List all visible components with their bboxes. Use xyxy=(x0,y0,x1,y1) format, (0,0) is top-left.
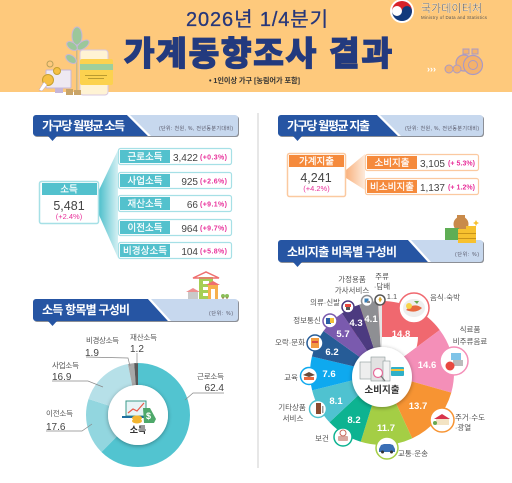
icon: money bag and coins xyxy=(445,215,479,243)
panel: consumption composition xyxy=(275,215,487,459)
pie category labels: 음식·숙박 xyxy=(430,292,460,302)
banner: income heading xyxy=(33,115,239,141)
pie centre: consumption icon and label xyxy=(352,347,412,407)
pie chart xyxy=(346,337,418,409)
icon: plant, phone and monitor illustration xyxy=(39,27,113,95)
donut chart xyxy=(97,374,179,456)
banner: consumption composition heading: (단위: %) xyxy=(455,251,479,258)
icon: food xyxy=(399,293,429,323)
row: earned income: (+0.3%) xyxy=(200,154,227,162)
total income box: (+2.4%) xyxy=(56,212,83,221)
icon: communication xyxy=(323,314,337,328)
pie values: 8.1 xyxy=(329,396,343,407)
pie category labels: ·담배 xyxy=(374,281,390,291)
pie category labels: 교육 xyxy=(284,373,298,382)
donut label: irregular income: 비경상소득 xyxy=(86,335,119,345)
row: earned income xyxy=(118,148,232,164)
pie values: 4.3 xyxy=(349,318,363,329)
row: business income: (+2.6%) xyxy=(200,178,227,186)
pie values: 5.7 xyxy=(336,329,350,340)
donut label: property income xyxy=(130,332,157,364)
row: earned income: 3,422 xyxy=(173,153,198,164)
logo: Ministry of Data and Statistics: 국가데이터처 xyxy=(421,2,482,15)
title: 가계동향조사 결과 xyxy=(124,35,392,72)
pie category labels: 비주류음료 xyxy=(453,337,487,346)
row: business income: 사업소득 xyxy=(128,175,163,187)
icon: houses xyxy=(186,272,229,300)
subtitle note: • 1인이상 가구 [농림어가 포함] xyxy=(209,76,300,85)
pie category labels: ·광열 xyxy=(455,422,471,432)
pie values: 6.2 xyxy=(325,347,339,358)
funnel connector xyxy=(99,150,118,258)
donut label: business income: 사업소득 xyxy=(52,361,79,370)
donut label: earned income: 62.4 xyxy=(205,383,224,394)
row: consumption expenditure: (+ 5.3%) xyxy=(448,160,475,168)
row: non-consumption expenditure: 비소비지출 xyxy=(370,182,414,193)
total expenditure box: 4,241 xyxy=(300,171,332,185)
row: non-consumption expenditure xyxy=(366,178,478,194)
banner: expenditure heading: (단위: 천원, %, 전년동분기대비) xyxy=(405,125,479,132)
row: earned income: 근로소득 xyxy=(128,152,163,163)
pie category labels: 오락·문화 xyxy=(275,338,305,347)
pie category labels: 1.1 xyxy=(387,292,397,301)
total income box xyxy=(40,182,98,224)
donut label: irregular income xyxy=(85,335,130,366)
icon: education xyxy=(300,368,318,384)
panel: income composition xyxy=(33,299,239,456)
donut label: property income: 재산소득 xyxy=(130,332,157,342)
donut label: irregular income: 1.9 xyxy=(85,348,99,359)
total income box: 소득 xyxy=(60,184,78,196)
pie category labels: 보건 xyxy=(315,433,329,443)
pie category labels: 주류 xyxy=(375,272,389,281)
logo: Ministry of Data and Statistics xyxy=(390,0,488,23)
pie category labels: 정보통신 xyxy=(293,315,321,325)
row: irregular income: 비경상소득 xyxy=(123,245,167,257)
icon: health xyxy=(334,428,352,446)
pie values: 14.6 xyxy=(418,360,436,371)
row: property income: 재산소득 xyxy=(128,199,163,210)
total income box: 5,481 xyxy=(53,199,85,213)
banner: consumption composition heading xyxy=(278,240,484,267)
row: property income: 66 xyxy=(187,200,198,211)
banner: income heading: (단위: 천원, %, 전년동분기대비) xyxy=(159,125,233,132)
pie category labels: 가정용품 xyxy=(338,274,366,284)
pie values: 11.7 xyxy=(377,423,395,434)
banner: income composition heading: 소득 항목별 구성비 xyxy=(42,302,130,317)
donut label: earned income: 근로소득 xyxy=(197,372,224,381)
pie category labels: 주거·수도 xyxy=(455,413,485,422)
donut label: transfer income: 17.6 xyxy=(46,422,66,433)
panel: household monthly expenditure xyxy=(278,115,484,196)
total expenditure box: (+4.2%) xyxy=(303,184,330,193)
icon: groceries xyxy=(440,347,468,375)
donut label: transfer income: 이전소득 xyxy=(46,408,73,418)
row: non-consumption expenditure: (+ 1.2%) xyxy=(448,184,475,192)
pie category labels: 식료품 xyxy=(460,325,480,334)
pie centre: consumption icon and label: 소비지출 xyxy=(365,384,400,396)
row: consumption expenditure xyxy=(366,154,478,170)
icon: money bags and coins xyxy=(427,49,482,74)
banner: income heading: 가구당 월평균 소득 xyxy=(42,118,125,133)
funnel connector xyxy=(346,154,365,190)
pie values: 14.8 xyxy=(392,329,410,340)
banner: consumption composition heading: 소비지출 비목별 구성비 xyxy=(287,245,397,259)
header background xyxy=(0,0,512,92)
divider xyxy=(258,113,259,468)
donut label: property income: 1.2 xyxy=(130,344,144,355)
icon: recreation xyxy=(307,335,323,351)
banner: income composition heading xyxy=(33,299,239,326)
row: property income: (+9.1%) xyxy=(200,202,227,208)
icon: alcohol and tobacco xyxy=(375,295,385,305)
row: irregular income: 104 xyxy=(181,247,198,258)
banner: expenditure heading xyxy=(278,115,484,141)
pie values: 8.2 xyxy=(347,415,361,426)
donut label: earned income xyxy=(185,372,224,400)
row: business income xyxy=(118,172,232,188)
row: consumption expenditure: 3,105 xyxy=(420,159,445,170)
donut label: business income xyxy=(52,361,103,387)
total expenditure box: 가계지출 xyxy=(299,156,334,168)
pie category labels: 기타상품 xyxy=(278,402,306,412)
donut centre: income icon and label: $ xyxy=(146,411,151,421)
icon: money bags and coins: ››› xyxy=(427,64,436,74)
icon: housing xyxy=(430,408,454,432)
row: irregular income xyxy=(118,242,232,258)
pie values: 7.6 xyxy=(322,369,336,380)
donut label: transfer income xyxy=(46,408,92,433)
row: property income xyxy=(118,196,232,212)
donut centre: income icon and label xyxy=(108,385,168,445)
pie category labels: 교통·운송 xyxy=(398,449,428,458)
donut label: business income: 16.9 xyxy=(52,372,72,383)
pie category labels xyxy=(275,272,487,458)
row: irregular income: (+5.8%) xyxy=(200,248,227,256)
row: business income: 925 xyxy=(181,177,198,188)
pie values xyxy=(322,314,436,434)
heading: year and quarter: 2026년 1/4분기 xyxy=(186,8,328,31)
icon: car xyxy=(376,437,398,459)
row: transfer income xyxy=(118,220,232,236)
icon: household goods xyxy=(362,296,372,306)
pie values: 13.7 xyxy=(409,401,427,412)
total expenditure box xyxy=(288,154,346,196)
banner: expenditure heading: 가구당 월평균 지출 xyxy=(287,118,370,133)
row: transfer income: 964 xyxy=(181,224,198,235)
pie values: 4.1 xyxy=(364,314,378,325)
row: transfer income: 이전소득 xyxy=(128,223,163,234)
pie category labels: 서비스 xyxy=(283,414,303,423)
banner: income composition heading: (단위: %) xyxy=(209,310,233,317)
row: transfer income: (+9.7%) xyxy=(200,226,227,232)
donut centre: income icon and label: 소득 xyxy=(130,425,146,435)
row: non-consumption expenditure: 1,137 xyxy=(420,183,445,194)
icon: clothing xyxy=(342,301,354,313)
panel: household monthly income xyxy=(33,115,239,258)
pie category labels: 가사서비스 xyxy=(335,286,369,295)
row: consumption expenditure: 소비지출 xyxy=(374,158,410,169)
logo: Ministry of Data and Statistics: Ministry of Data and Statistics xyxy=(421,15,488,20)
pie category labels: 의류·신발 xyxy=(310,297,340,307)
icon: other goods and services xyxy=(310,400,326,418)
